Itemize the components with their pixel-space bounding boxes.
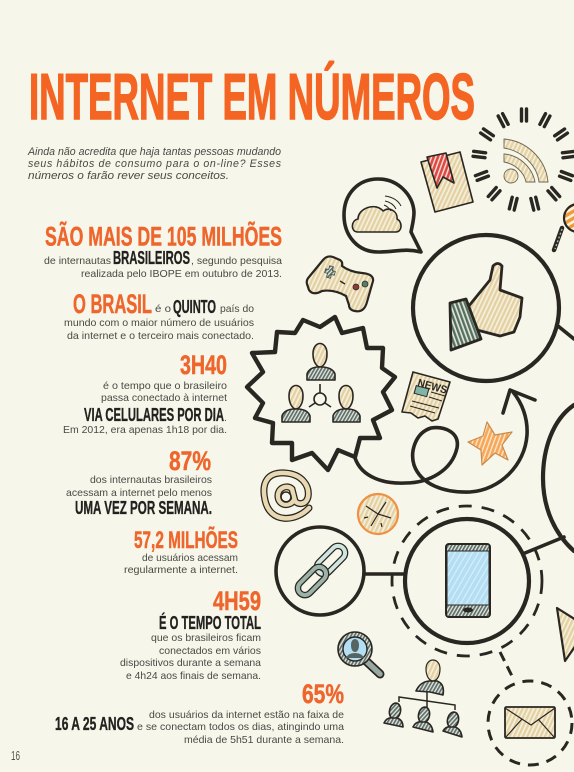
stat: o Brasil quinto: é o: [155, 304, 171, 315]
icon: envelope circle: [488, 652, 572, 765]
stat: 3h40: passa conectado à internet: [101, 393, 227, 404]
stat: 3h40: Em 2012, era apenas 1h18 por dia.: [63, 425, 227, 436]
icon: star: [468, 422, 512, 465]
panel: big circle at right edge: [543, 405, 574, 551]
icon: newspaper: [402, 372, 450, 421]
panel: phone circle: [392, 506, 564, 656]
icon: smartphone: [446, 544, 490, 617]
stat: 65%: 65%: [302, 679, 344, 709]
stat: 65%: 16 A 25 ANOS: [55, 714, 134, 734]
icon: magnifier: [338, 632, 380, 674]
stat: o Brasil quinto: QUINTO: [173, 297, 216, 317]
stat: 4h59: 4H59: [213, 586, 261, 616]
icon: RSS with rays: [473, 109, 574, 210]
stat: 65%: média de 5h51 durante a semana.: [184, 735, 344, 746]
icon: newspaper: NEWS: [416, 377, 448, 397]
icon: triangle at right edge: [557, 608, 574, 661]
stat: 87%: UMA VEZ POR SEMANA.: [75, 498, 212, 518]
stat: 4h59: dispositivos durante a semana: [120, 658, 261, 669]
icon: orange lollipop: [554, 204, 574, 250]
stat: 4h59: É O TEMPO TOTAL: [159, 612, 261, 633]
icon: envelope: [505, 707, 555, 738]
stat: 105 milhões: BRASILEIROS: [113, 248, 190, 268]
stat: 4h59: que os brasileiros ficam: [151, 633, 261, 644]
icon: bookmark card: [421, 152, 473, 212]
stat: 105 milhões: realizada pelo IBOPE em outubro de 2013.: [81, 269, 282, 280]
stat: o Brasil quinto: da internet e o terceiro mais conectado.: [67, 331, 254, 342]
icon: person top: [307, 344, 335, 380]
stat: 87%: acessam a internet pelo menos: [66, 488, 212, 499]
stat: 57,2 milhões: regularmente a internet.: [124, 565, 238, 576]
panel: chain circle: [276, 527, 405, 615]
stat: 4h59: e 4h24 aos finais de semana.: [126, 671, 261, 682]
stat: 105 milhões: [44, 222, 282, 280]
icon: person left: [282, 386, 310, 422]
icon: at sign: [264, 473, 309, 518]
stat: o Brasil quinto: país do: [220, 304, 254, 315]
icon: game controller: [307, 256, 373, 311]
icon: person right: [333, 386, 360, 422]
stat: 3h40: 3H40: [180, 350, 227, 380]
intro text: números o farão rever seus conceitos.: [28, 170, 229, 182]
stat: 3h40: .: [224, 413, 227, 424]
intro text: Ainda não acredita que haja tantas pessoas mudando: [27, 146, 281, 158]
intro text: seus hábitos de consumo para o on-line? Esses: [28, 158, 282, 170]
stat: 3h40: [63, 350, 227, 436]
icon: thumbs up: [450, 264, 522, 350]
panel: people burst: [247, 317, 395, 470]
stat: 57,2 milhões: [124, 526, 238, 576]
stat: 65%: e se conectam todos os dias, atingindo uma: [137, 722, 344, 733]
stat: 57,2 milhões: de usuários acessam: [142, 553, 238, 564]
stat: 87%: [66, 446, 212, 518]
stat: o Brasil quinto: O BRASIL: [73, 289, 152, 319]
stat: 4h59: conectados em vários: [159, 646, 261, 657]
stat: 65%: [55, 679, 344, 746]
intro text: [27, 146, 282, 182]
stat: 105 milhões: de internautas: [44, 256, 111, 267]
icon: chain link: [295, 543, 348, 598]
stat: 3h40: VIA CELULARES POR DIA: [84, 405, 224, 425]
stat: 105 milhões: SÃO MAIS DE 105 MILHÕES: [45, 222, 282, 252]
stat: 3h40: é o tempo que o brasileiro: [103, 381, 227, 392]
stat: o Brasil quinto: mundo com o maior número de usuários: [64, 318, 254, 329]
stat: 65%: dos usuários da internet estão na faixa de: [149, 710, 344, 721]
page number: 16: [11, 748, 20, 763]
arrow: looping: [355, 390, 535, 492]
stat: o Brasil quinto: [64, 289, 254, 342]
stat: 57,2 milhões: 57,2 MILHÕES: [134, 526, 238, 554]
icon: network node: [309, 384, 331, 407]
icon: org chart: [384, 660, 462, 737]
panel: thumbs up circle: [413, 235, 574, 381]
stat: 4h59: [120, 586, 261, 682]
icon: clock: [358, 494, 398, 534]
icon: cloud speech bubble: [344, 179, 421, 252]
stat: 87%: 87%: [169, 446, 211, 476]
stat: 87%: dos internautas brasileiros: [90, 475, 212, 486]
stat: 105 milhões: , segundo pesquisa: [191, 256, 282, 267]
